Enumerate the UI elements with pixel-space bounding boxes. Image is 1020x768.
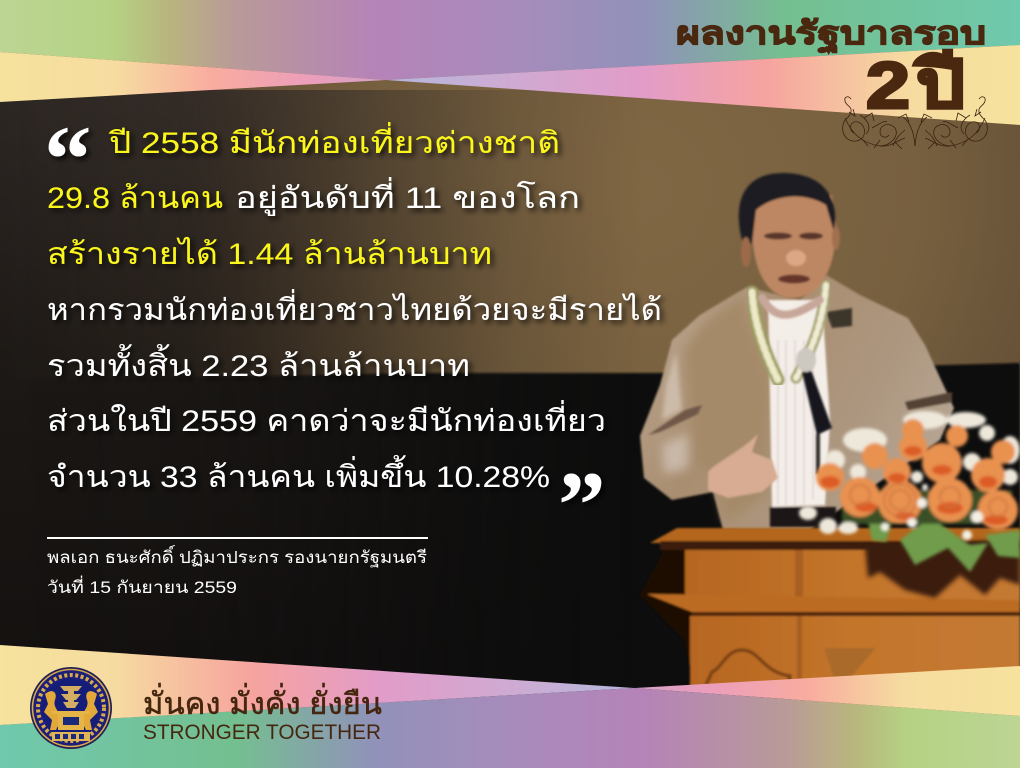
icon: government emblem [30,667,112,749]
base banner [52,732,90,741]
line 3: สร้างรายได้ 1.44 ล้านล้านบาท [47,236,492,271]
title: ผลงานรัฐบาลรอบ: ผลงานรัฐบาลรอบ [676,15,986,54]
shirt [768,300,852,527]
podium [640,528,1020,690]
opening quote mark: “ [44,106,92,212]
foliage [868,517,1020,572]
line 6: ส่วนในปี 2559 คาดว่าจะมีนักท่องเที่ยว [47,400,606,438]
jacket [640,275,954,530]
line 2 rest: อยู่อันดับที่ 11 ของโลก [235,177,580,216]
title number: 2 ปี: ปี [913,47,965,121]
baby's breath [799,411,1020,534]
slogan: Thai: มั่นคง มั่งคั่ง ยั่งยืน [143,683,382,721]
roses [816,419,1018,530]
quote block [44,106,662,558]
line 1: ปี 2558 มีนักท่องเที่ยวต่างชาติ [108,122,560,160]
line 4: หากรวมนักท่องเที่ยวชาวไทยด้วยจะมีรายได้ [47,289,662,327]
flower shadow on podium [865,540,1020,598]
lions [44,691,60,730]
attribution [47,537,428,597]
white accents [881,484,983,540]
date: วันที่ 15 กันยายน 2559 [47,575,237,597]
garland [752,285,826,380]
title number: 2 ปี: 2 [866,48,910,122]
head [739,173,840,298]
hand [708,434,778,498]
pedestal [52,711,90,730]
top rainbow bands [0,0,1020,125]
slogan: English: STRONGER TOGETHER [143,721,381,744]
title number: 2 ปี [866,47,965,122]
photo: speaker at podium [640,173,1020,690]
ornament: floral flourish [843,97,987,149]
line 5: รวมทั้งสิ้น 2.23 ล้านล้านบาท [47,344,470,383]
line 7: จำนวน 33 ล้านคน เพิ่มขึ้น 10.28% [47,455,550,494]
bottom rainbow bands [0,645,1020,768]
microphone [796,348,832,474]
closing quote mark: ” [558,452,606,558]
flower arrangement [799,411,1020,572]
speaker name: พลเอก ธนะศักดิ์ ปฏิมาประกร รองนายกรัฐมนตรี [47,545,427,568]
line 2 highlight: 29.8 ล้านคน [47,182,223,215]
urn [60,686,82,708]
